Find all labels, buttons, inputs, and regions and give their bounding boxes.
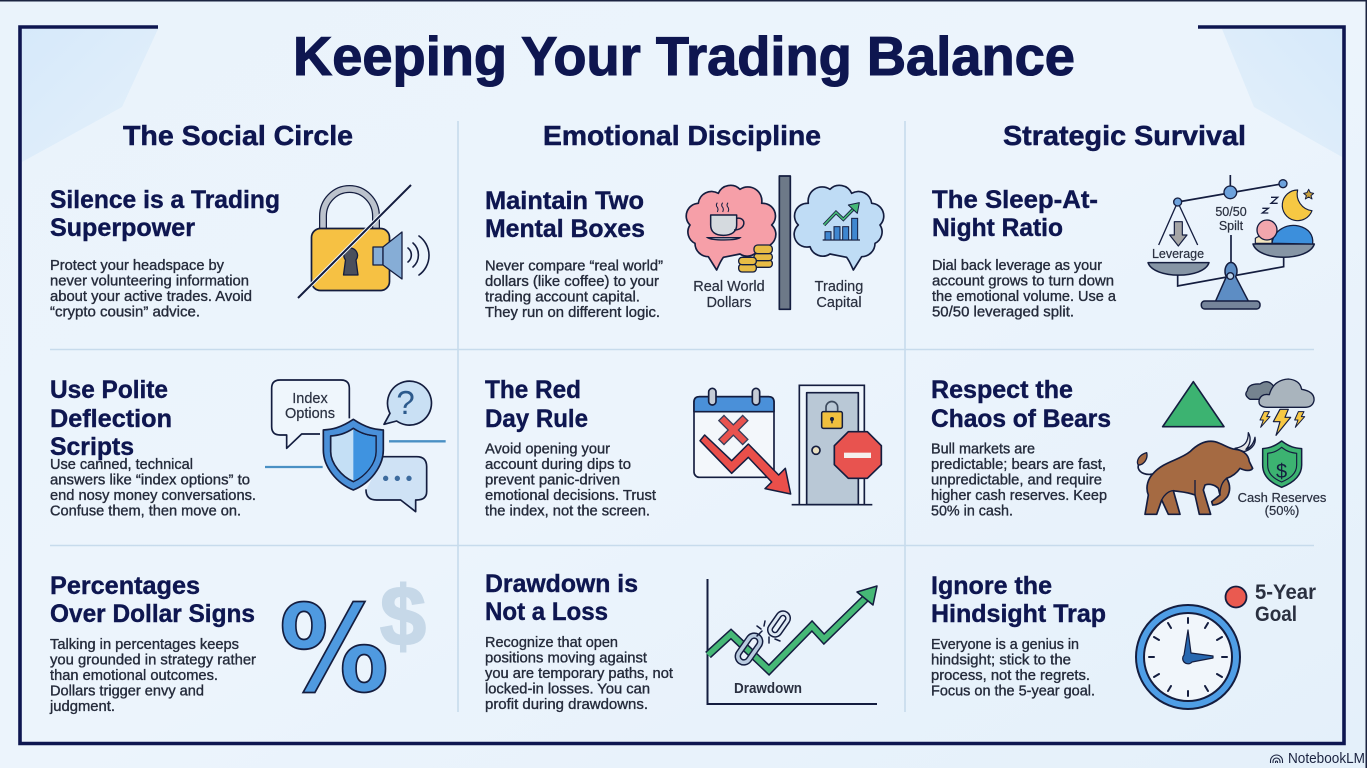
heading: Over Dollar Signs <box>50 600 255 628</box>
panel: Silence is a Trading Superpower <box>50 185 429 320</box>
body text: the index, not the screen. <box>485 504 650 520</box>
icon: balance scale: 50/50 <box>1215 205 1247 219</box>
panel: The Red Day Rule <box>485 376 881 520</box>
heading: Night Ratio <box>932 214 1063 242</box>
body text: judgment. <box>49 699 115 715</box>
heading: Superpower <box>50 214 195 242</box>
heading: Mental Boxes <box>485 215 645 243</box>
body text: Never compare “real world” <box>485 258 663 274</box>
body text: Dial back leverage as your <box>932 258 1102 274</box>
body text: you are temporary paths, not <box>485 666 673 682</box>
heading: Chaos of Bears <box>931 405 1111 433</box>
heading: Silence is a Trading <box>50 186 280 214</box>
panel: Maintain Two Mental Boxes <box>485 176 884 321</box>
icon: clock <box>1136 605 1240 709</box>
body text <box>485 442 656 520</box>
body text: Protect your headspace by <box>50 258 225 274</box>
icon: two brains with divider: Real World <box>693 279 765 295</box>
body text <box>50 457 256 520</box>
body text: Avoid opening your <box>485 442 610 458</box>
heading <box>931 572 1106 628</box>
icon: percent and faded dollar signs: $ <box>380 569 426 663</box>
body text: “crypto cousin” advice. <box>50 304 200 320</box>
icon: lock and muted speaker <box>298 185 429 298</box>
body text: Confuse them, then move on. <box>50 504 241 520</box>
body text: higher cash reserves. Keep <box>931 488 1107 504</box>
heading: Ignore the <box>931 572 1052 600</box>
heading <box>485 187 645 243</box>
heading: Not a Loss <box>485 598 608 626</box>
heading <box>485 570 638 626</box>
body text: predictable; bears are fast, <box>931 457 1106 473</box>
chart: drawdown line with broken chain <box>708 579 877 704</box>
body text: trading account capital. <box>485 290 640 306</box>
column heading: Emotional Discipline: Emotional Discipline <box>543 120 821 151</box>
icon: triangle, bull, storm and cash shield: (50%) <box>1265 503 1299 518</box>
heading: Respect the <box>931 376 1073 404</box>
panel: Percentages Over Dollar Signs <box>49 569 426 720</box>
icon: balance scale <box>1148 175 1314 309</box>
body text: profit during drawdowns. <box>485 697 648 713</box>
body text: Everyone is a genius in <box>931 637 1079 653</box>
panel: Ignore the Hindsight Trap <box>931 572 1316 709</box>
icon: balance scale: Spilt <box>1219 219 1244 233</box>
body text <box>931 442 1107 520</box>
body text: you grounded in strategy rather <box>50 652 256 668</box>
column heading: Strategic Survival: Strategic Survival <box>1003 120 1246 151</box>
body text: Bull markets are <box>931 442 1035 458</box>
body text <box>932 258 1116 320</box>
body text <box>49 637 256 715</box>
icon: red goal marker with 5-Year Goal label: 5-Year <box>1255 581 1316 604</box>
body text: unpredictable, and require <box>931 472 1102 488</box>
body text: positions moving against <box>485 650 647 666</box>
body text: Talking in percentages keeps <box>50 637 239 653</box>
body text: than emotional outcomes. <box>50 668 218 684</box>
icon: two brains with divider <box>686 176 884 311</box>
body text <box>485 258 663 321</box>
heading: Drawdown is <box>485 570 638 598</box>
panel: Drawdown is Not a Loss <box>485 570 877 713</box>
column heading: The Social Circle: The Social Circle <box>123 120 353 151</box>
body text: emotional decisions. Trust <box>485 488 656 504</box>
icon: triangle, bull, storm and cash shield <box>1137 379 1327 518</box>
heading <box>485 376 588 433</box>
panel: The Sleep-At-Night Ratio <box>932 175 1314 320</box>
heading <box>932 186 1098 242</box>
icon: shield with speech bubbles <box>265 380 446 512</box>
icon: two brains with divider: Trading <box>815 279 863 295</box>
body text: Focus on the 5-year goal. <box>931 684 1095 700</box>
body text: account during dips to <box>485 457 631 473</box>
heading <box>50 572 255 628</box>
icon: balance scale: Leverage <box>1152 247 1204 261</box>
body text: never volunteering information <box>50 274 249 290</box>
heading <box>931 376 1111 433</box>
heading: Maintain Two <box>485 187 644 215</box>
body text: dollars (like coffee) to your <box>485 274 659 290</box>
body text: Dollars trigger envy and <box>50 684 204 700</box>
body text: locked-in losses. You can <box>485 682 650 698</box>
body text: account grows to turn down <box>932 274 1114 290</box>
heading <box>50 376 172 461</box>
body text: prevent panic-driven <box>485 472 620 488</box>
body text <box>485 635 673 713</box>
body text: 50/50 leveraged split. <box>932 304 1074 320</box>
body text: Recognize that open <box>485 635 618 651</box>
body text: answers like “index options” to <box>50 472 250 488</box>
body text <box>50 258 252 320</box>
icon: red goal marker with 5-Year Goal label: Goal <box>1255 603 1297 626</box>
icon: two brains with divider: Dollars <box>706 295 752 311</box>
body text: about your active trades. Avoid <box>50 289 252 305</box>
icon: percent and faded dollar signs: % <box>279 581 389 720</box>
title: Keeping Your Trading Balance <box>293 25 1075 87</box>
heading: The Sleep-At- <box>932 186 1098 214</box>
icon: shield with speech bubbles: ? <box>396 384 415 421</box>
chart: drawdown line with broken chain: Drawdown <box>734 681 802 697</box>
icon: two brains with divider: Capital <box>816 295 862 311</box>
panel: Use Polite Deflection Scripts <box>50 376 446 520</box>
heading <box>50 186 280 242</box>
body text: process, not the regrets. <box>931 668 1090 684</box>
icon: red goal marker with 5-Year Goal label <box>1226 581 1316 626</box>
icon: shield with speech bubbles: Options <box>285 406 335 422</box>
heading: Hindsight Trap <box>931 600 1106 628</box>
heading: The Red <box>485 376 581 404</box>
icon: calendar, falling arrow and locked door <box>694 385 881 505</box>
body text: hindsight; stick to the <box>931 652 1071 668</box>
icon: triangle, bull, storm and cash shield: Cash Reserves <box>1238 490 1327 505</box>
panel: Respect the Chaos of Bears <box>931 376 1327 520</box>
heading: Percentages <box>50 572 200 600</box>
body text: end nosy money conversations. <box>50 488 256 504</box>
body text <box>931 637 1095 700</box>
icon: shield with speech bubbles: Index <box>292 391 328 407</box>
heading: Scripts <box>50 433 134 461</box>
body text: 50% in cash. <box>931 504 1013 520</box>
heading: Day Rule <box>485 405 588 433</box>
body text: They run on different logic. <box>485 305 660 321</box>
heading: Use Polite <box>50 376 168 404</box>
heading: Deflection <box>50 405 172 433</box>
body text: Use canned, technical <box>50 457 193 473</box>
body text: the emotional volume. Use a <box>932 289 1116 305</box>
icon: triangle, bull, storm and cash shield: $ <box>1276 461 1287 483</box>
